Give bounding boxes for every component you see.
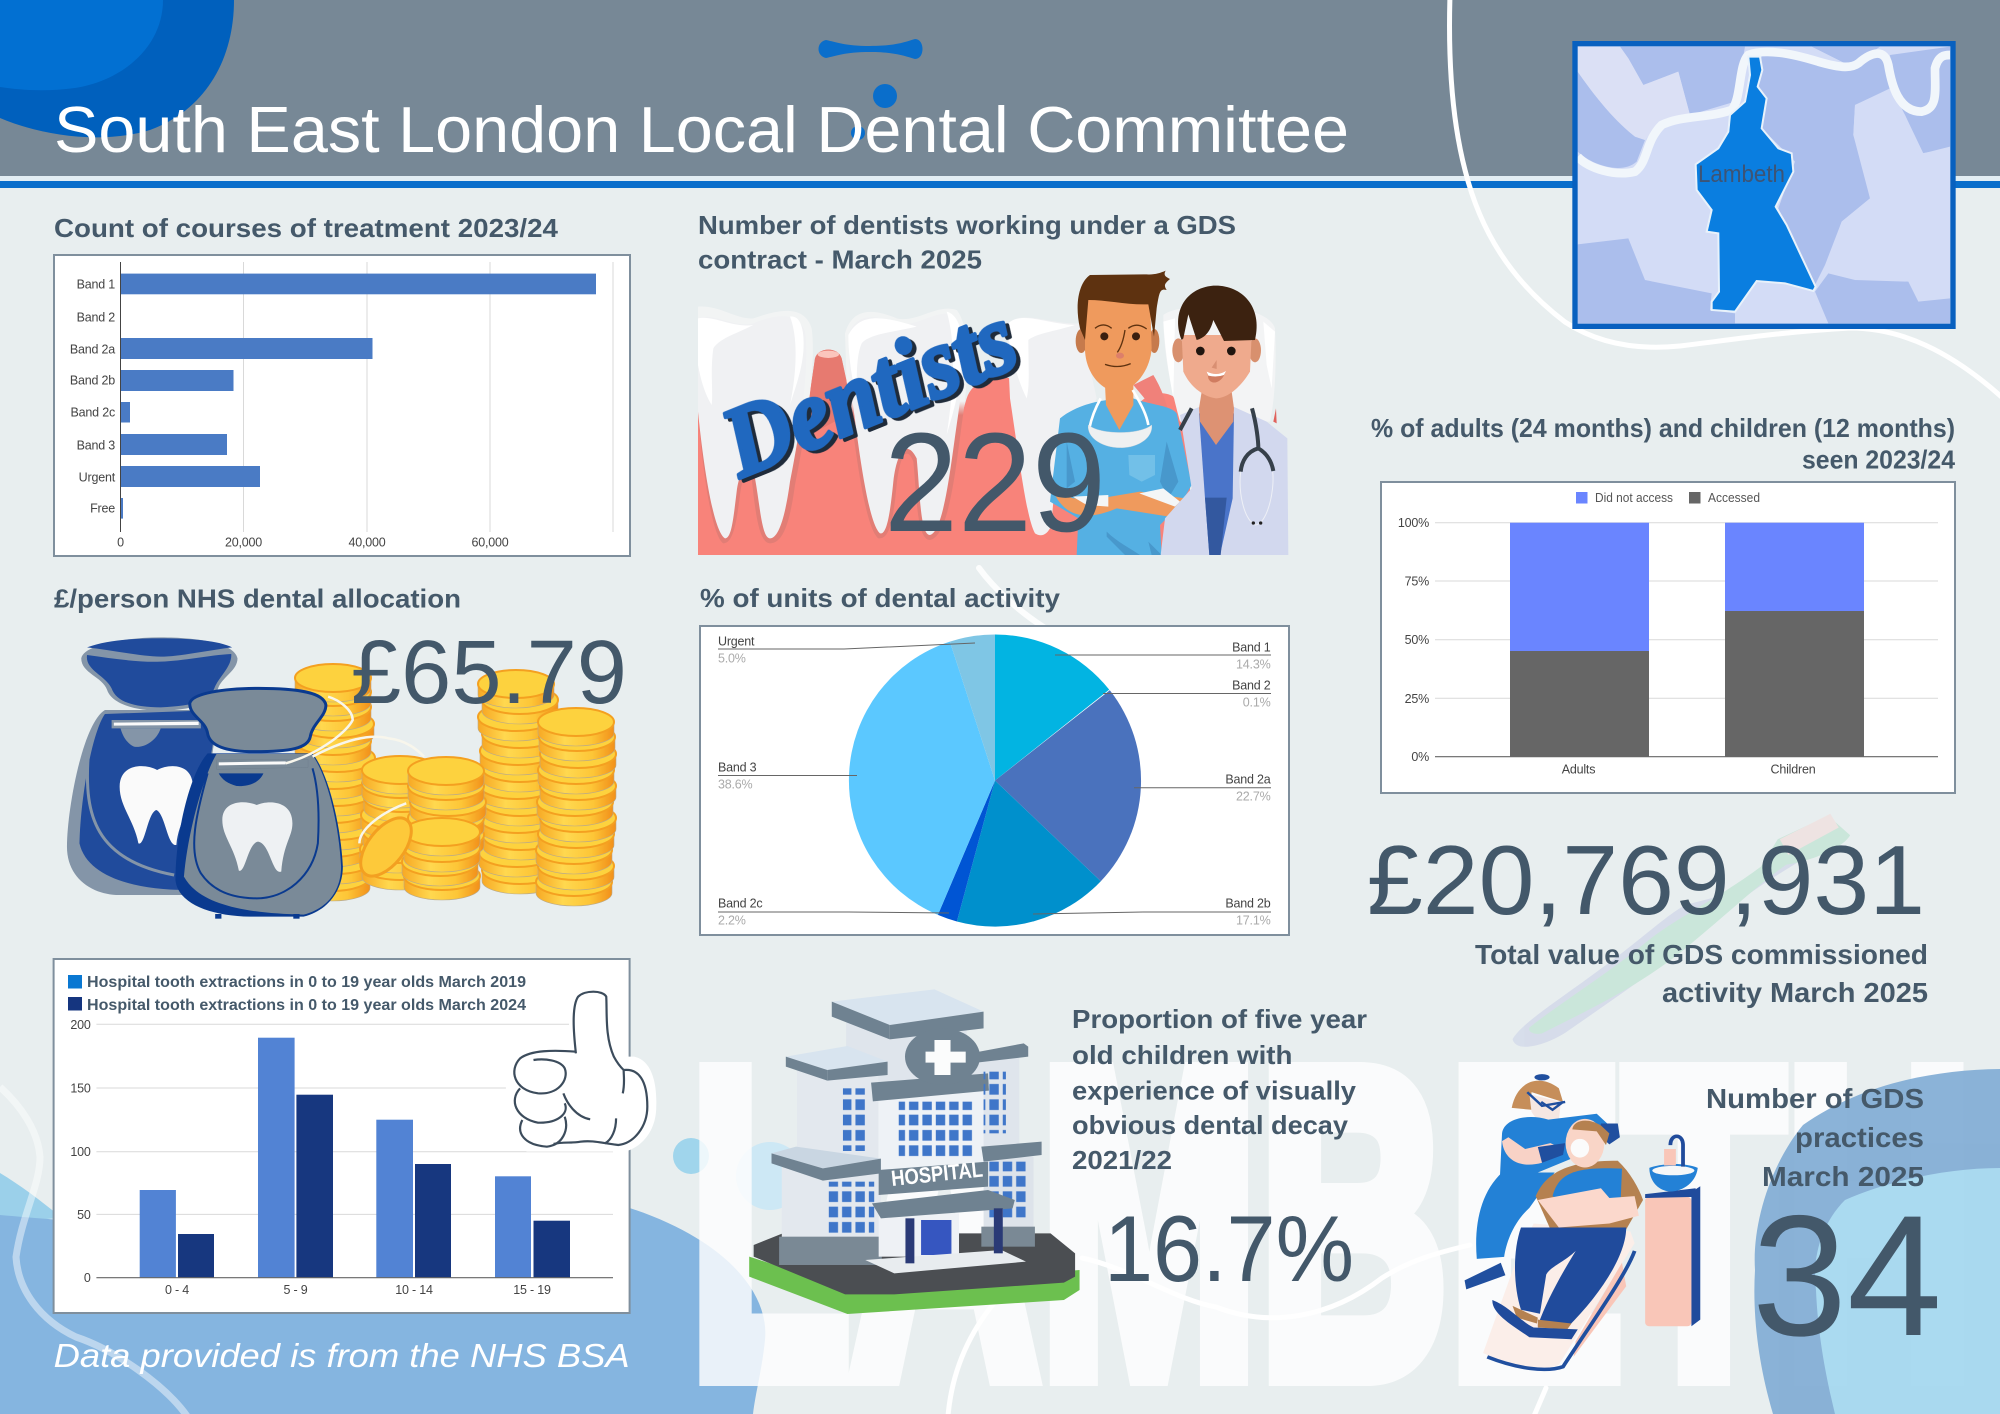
heading: number of dentists: Number of dentists working under a GDS <box>698 210 1236 240</box>
text: proportion of five year olds: 2021/22 <box>1072 1145 1172 1175</box>
bar chart: courses of treatment: Band 2a <box>70 342 115 356</box>
pie labels: Band 2b <box>1225 896 1271 910</box>
legend <box>1576 490 1760 505</box>
text: proportion of five year olds <box>1072 1004 1367 1175</box>
heading: adults and children seen <box>1371 413 1956 475</box>
pie labels <box>718 634 1271 928</box>
decoration: top-left blue blobs <box>0 0 234 137</box>
text: total value caption <box>1475 939 1928 1008</box>
text: number of GDS practices <box>1706 1083 1924 1192</box>
decoration: tooth-shaped dumbbell <box>818 39 922 140</box>
map: Lambeth borough <box>1575 44 1953 326</box>
slice: Urgent <box>950 634 995 780</box>
slice: Band 3 <box>849 642 995 915</box>
bar chart: courses of treatment: 20,000 <box>225 536 262 550</box>
pie labels: Urgent <box>718 634 755 648</box>
illustration: dentist treating patient <box>1465 1074 1700 1369</box>
stacked bar chart: adults and children seen: 0% <box>1411 750 1429 764</box>
heading: adults and children seen: seen 2023/24 <box>1802 445 1956 475</box>
slice: Band 2b <box>957 780 1101 927</box>
bar chart: courses of treatment: Band 3 <box>77 438 115 452</box>
legend: Hospital tooth extractions in 0 to 19 year olds March 2024 <box>87 997 526 1014</box>
bar chart: courses of treatment: Band 2 <box>77 310 115 324</box>
dentist <box>1512 1081 1563 1110</box>
number: dentists 229: 229 <box>884 403 1106 561</box>
bar chart: courses of treatment: Band 2b <box>70 374 115 388</box>
map label: Lambeth <box>1698 161 1785 188</box>
Lambeth highlight <box>1696 57 1816 312</box>
heading: number of dentists <box>698 210 1236 275</box>
text: number of GDS practices: practices <box>1795 1122 1924 1153</box>
bar chart: courses of treatment: Free <box>90 502 115 516</box>
bar chart: courses of treatment: Urgent <box>79 470 116 484</box>
legend: Did not access <box>1595 490 1673 505</box>
bar chart: hospital tooth extractions: 15 - 19 <box>513 1283 551 1297</box>
bar chart: hospital tooth extractions: 5 - 9 <box>283 1283 308 1297</box>
slice: Band 2c <box>938 780 995 922</box>
text: number of GDS practices: Number of GDS <box>1706 1083 1924 1114</box>
icon: thumbs up <box>506 990 656 1152</box>
pie labels: 22.7% <box>1236 790 1271 804</box>
text art: Dentists: Dentists <box>706 281 1031 499</box>
bar chart: hospital tooth extractions: 50 <box>77 1208 91 1222</box>
stacked bar chart: adults and children seen <box>1381 482 1955 793</box>
bar chart: hospital tooth extractions: 0 - 4 <box>165 1283 189 1297</box>
bar chart: hospital tooth extractions <box>54 959 630 1313</box>
heading: allocation per person: £/person NHS dental allocation <box>54 584 461 614</box>
pie labels: 2.2% <box>718 914 746 928</box>
title: South East London Local Dental Committee <box>54 93 1349 166</box>
pie labels: 0.1% <box>1243 696 1271 710</box>
number: 16.7%: 16.7% <box>1104 1196 1354 1301</box>
pie labels: Band 2a <box>1225 772 1271 786</box>
bar chart: courses of treatment <box>54 255 630 556</box>
illustration: floss boxes with teeth <box>67 637 424 919</box>
decoration: bottom-left blue blobs <box>0 1087 804 1414</box>
text: proportion of five year olds: Proportion of five year <box>1072 1004 1367 1034</box>
bar chart: courses of treatment: Band 1 <box>77 278 115 292</box>
slice: Band 2a <box>995 690 1141 881</box>
stacked bar chart: adults and children seen: 75% <box>1405 574 1429 588</box>
text: proportion of five year olds: old children with <box>1072 1040 1292 1070</box>
header band <box>0 0 2000 188</box>
bar chart: courses of treatment: 0 <box>117 536 124 550</box>
illustration: hospital building <box>749 989 1080 1314</box>
pie labels: Band 3 <box>718 760 757 774</box>
heading: courses of treatment: Count of courses of treatment 2023/24 <box>54 213 559 243</box>
illustration: right teeth and gum <box>1000 306 1277 555</box>
number: 34: 34 <box>1752 1180 1942 1372</box>
bar chart: courses of treatment: Band 2c <box>71 406 115 420</box>
sink unit <box>1645 1197 1691 1326</box>
text: proportion of five year olds: obvious dental decay <box>1072 1110 1349 1140</box>
text: number of GDS practices: March 2025 <box>1762 1161 1924 1192</box>
legend: Accessed <box>1708 490 1760 505</box>
decoration: white curves <box>948 0 2000 1414</box>
number: total value: £20,769,931 <box>1367 825 1925 935</box>
heading: number of dentists: contract - March 2025 <box>698 245 982 275</box>
bar chart: courses of treatment: 40,000 <box>348 536 386 550</box>
pie labels: Band 2c <box>718 896 762 910</box>
bar chart: hospital tooth extractions: 100 <box>70 1145 91 1159</box>
stacked bar chart: adults and children seen: 100% <box>1398 516 1429 530</box>
legend <box>68 974 526 1014</box>
illustration: gold coin stacks <box>294 664 616 906</box>
number: £65.79: £65.79 <box>351 623 627 723</box>
text: total value caption: activity March 2025 <box>1662 977 1928 1008</box>
bar chart: hospital tooth extractions: 0 <box>84 1271 91 1285</box>
text: total value caption: Total value of GDS commissioned <box>1475 939 1928 970</box>
dental chair <box>1483 1224 1635 1368</box>
pie labels: Band 1 <box>1232 640 1271 654</box>
pie labels: 17.1% <box>1236 914 1271 928</box>
heading: adults and children seen: % of adults (24 months) and children (12 months) <box>1371 413 1955 443</box>
icon: faint toothbrush <box>1513 814 1850 1047</box>
illustration: female dentist <box>1161 286 1288 555</box>
stacked bar chart: adults and children seen: Adults <box>1562 762 1595 776</box>
legend: Hospital tooth extractions in 0 to 19 year olds March 2019 <box>87 974 526 991</box>
stacked bar chart: adults and children seen: Children <box>1771 762 1816 776</box>
pie labels: 14.3% <box>1236 658 1271 672</box>
slice: Band 1 <box>995 634 1109 780</box>
decoration: bottom-right blue blobs <box>1754 1069 2000 1414</box>
bar chart: hospital tooth extractions: 10 - 14 <box>395 1283 433 1297</box>
bar chart: hospital tooth extractions: 200 <box>70 1018 91 1032</box>
pie labels: Band 2 <box>1232 678 1271 692</box>
illustration: teeth and gums <box>698 307 1190 555</box>
illustration: male dentist <box>1050 271 1192 555</box>
text: proportion of five year olds: experience of visually <box>1072 1075 1357 1105</box>
bar chart: courses of treatment: 60,000 <box>471 536 509 550</box>
stacked bar chart: adults and children seen: 50% <box>1405 633 1429 647</box>
patient <box>1536 1161 1643 1229</box>
footnote: data source: Data provided is from the NHS BSA <box>54 1337 630 1374</box>
bar chart: hospital tooth extractions: 150 <box>70 1082 91 1096</box>
pie labels: 5.0% <box>718 652 746 666</box>
heading: units of dental activity: % of units of dental activity <box>700 583 1061 613</box>
stacked bar chart: adults and children seen: 25% <box>1405 692 1429 706</box>
pie chart: units of dental activity <box>700 626 1289 935</box>
hospital sign text: HOSPITAL <box>890 1156 984 1191</box>
pie labels: 38.6% <box>718 778 753 792</box>
